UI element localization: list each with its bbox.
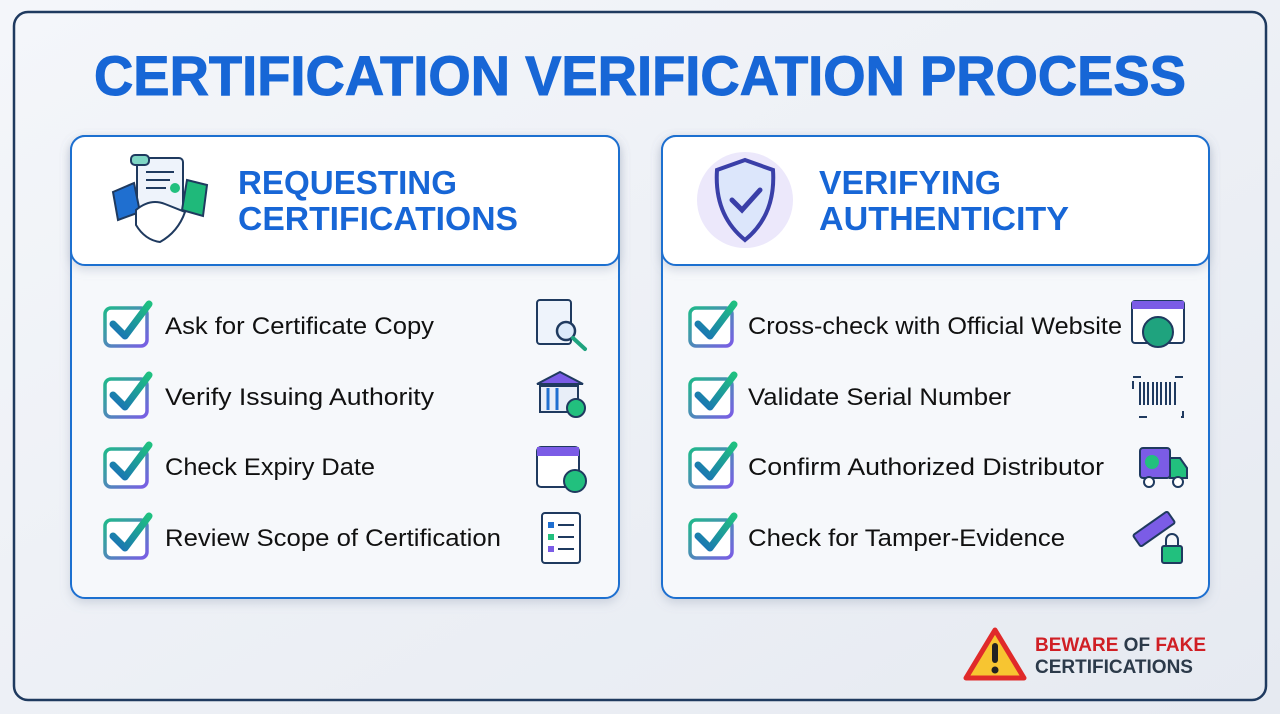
icon: void seal lock [1133, 511, 1182, 563]
item: ask for certificate copy: Ask for Certificate Copy [165, 313, 434, 340]
item: ask for certificate copy [105, 300, 585, 349]
icon: barcode [1133, 377, 1183, 417]
item: check expiry date: Check Expiry Date [165, 454, 375, 481]
callout text: CERTIFICATIONS [1035, 657, 1193, 678]
item: verify issuing authority: Verify Issuing Authority [165, 384, 434, 411]
callout text [1035, 635, 1206, 678]
item: cross-check website [690, 301, 1184, 347]
title: CERTIFICATION VERIFICATION PROCESS [94, 44, 1186, 107]
panel: verifying authenticity [662, 136, 1209, 598]
item: tamper evidence [690, 511, 1182, 563]
item: confirm distributor: Confirm Authorized Distributor [748, 454, 1104, 481]
header text: verifying authenticity: VERIFYING [819, 164, 1001, 201]
item: verify issuing authority [105, 372, 585, 417]
panel header: requesting [71, 136, 619, 265]
item: confirm distributor [690, 445, 1187, 487]
icon: checklist doc [542, 513, 580, 563]
icon: truck [1140, 448, 1187, 487]
item: validate serial: Validate Serial Number [748, 384, 1011, 411]
header text: verifying authenticity: AUTHENTICITY [819, 200, 1069, 237]
item: cross-check website: Cross-check with Official Website [748, 313, 1122, 340]
icon: browser globe [1132, 301, 1184, 347]
item: tamper evidence: Check for Tamper-Evidence [748, 525, 1065, 552]
panel: requesting certifications [71, 136, 619, 598]
header text: requesting certifications: REQUESTING [238, 164, 457, 201]
header text: verifying authenticity [819, 164, 1069, 237]
item: check expiry date [105, 445, 586, 492]
item: review scope: Review Scope of Certification [165, 525, 501, 552]
header text: requesting certifications: CERTIFICATIONS [238, 200, 518, 237]
icon: institution [537, 372, 585, 417]
icon: handshake with document [113, 155, 207, 242]
list: verifying items [690, 301, 1187, 563]
panel header: verifying [662, 136, 1209, 265]
icon: shield check [697, 152, 793, 248]
icon: calendar clock [537, 447, 586, 492]
item: review scope [105, 513, 580, 563]
icon: warning triangle [966, 630, 1024, 678]
item: validate serial [690, 375, 1183, 417]
list: requesting items [105, 300, 586, 563]
icon: doc magnifier [537, 300, 585, 349]
header text: requesting certifications [238, 164, 518, 237]
callout: beware of fake certifications [966, 630, 1206, 678]
callout text: BEWARE OF FAKE [1035, 635, 1206, 656]
